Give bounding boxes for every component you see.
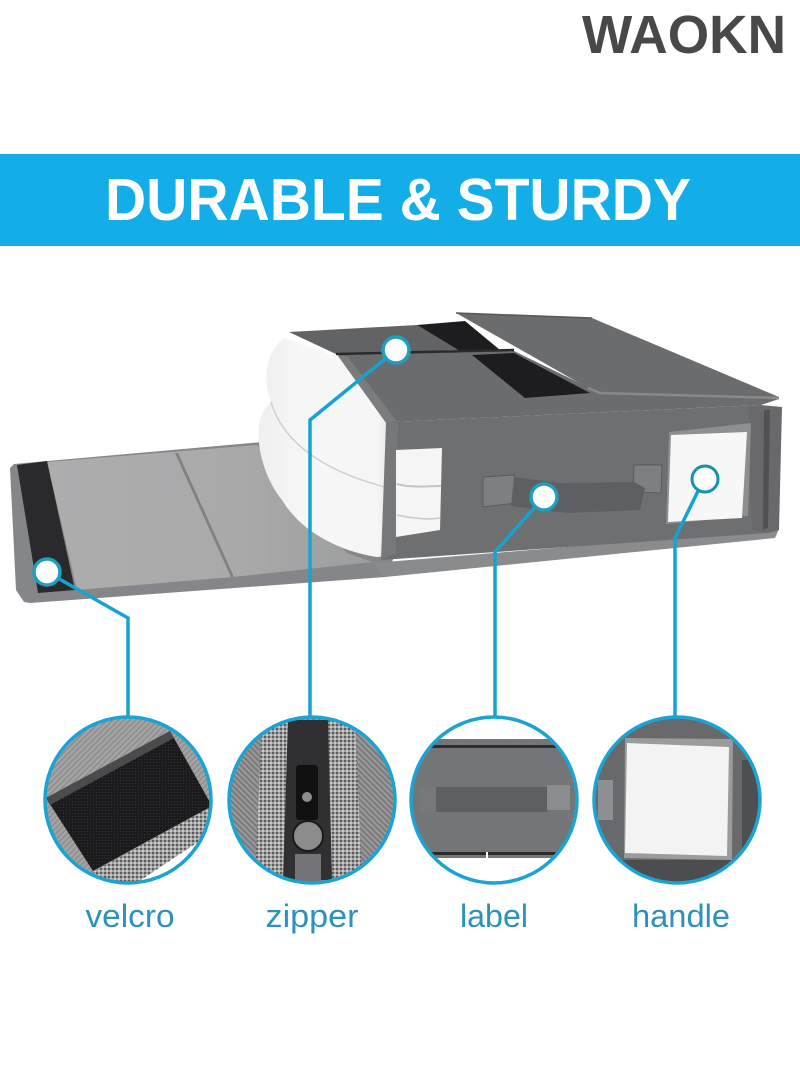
detail circle: zipper [227,715,397,885]
detail circle: handle [592,715,762,885]
label pocket [666,423,751,524]
title banner [0,154,800,246]
handle [483,465,662,513]
zipper line [336,350,514,354]
detail circle: velcro [43,715,213,885]
rear velcro strip [417,321,500,350]
leader lines [47,350,703,720]
marker: handle point [692,466,718,492]
white bedding [258,338,398,557]
title banner: DURABLE & STURDY [105,167,691,233]
base strip [373,529,779,577]
lid flap [456,313,779,398]
box top, front section [338,351,779,422]
caption: velcro: velcro [86,898,174,934]
brand logo: WAOKN [582,5,786,65]
box edge binding [338,356,398,423]
detail circle: label [409,715,579,885]
left binding [381,423,398,560]
side window [396,448,442,537]
marker: label point [531,484,557,510]
front velcro strip [472,353,590,398]
marker: zipper point [383,337,409,363]
caption: zipper: zipper [266,898,359,934]
box top, rear section [289,325,458,355]
box front [381,405,768,560]
marker: velcro point [34,559,60,585]
caption: handle: handle [632,898,730,934]
caption: label: label [460,898,528,934]
product illustration: storage bag [10,313,782,603]
right binding [749,405,782,533]
open flap [10,442,395,603]
